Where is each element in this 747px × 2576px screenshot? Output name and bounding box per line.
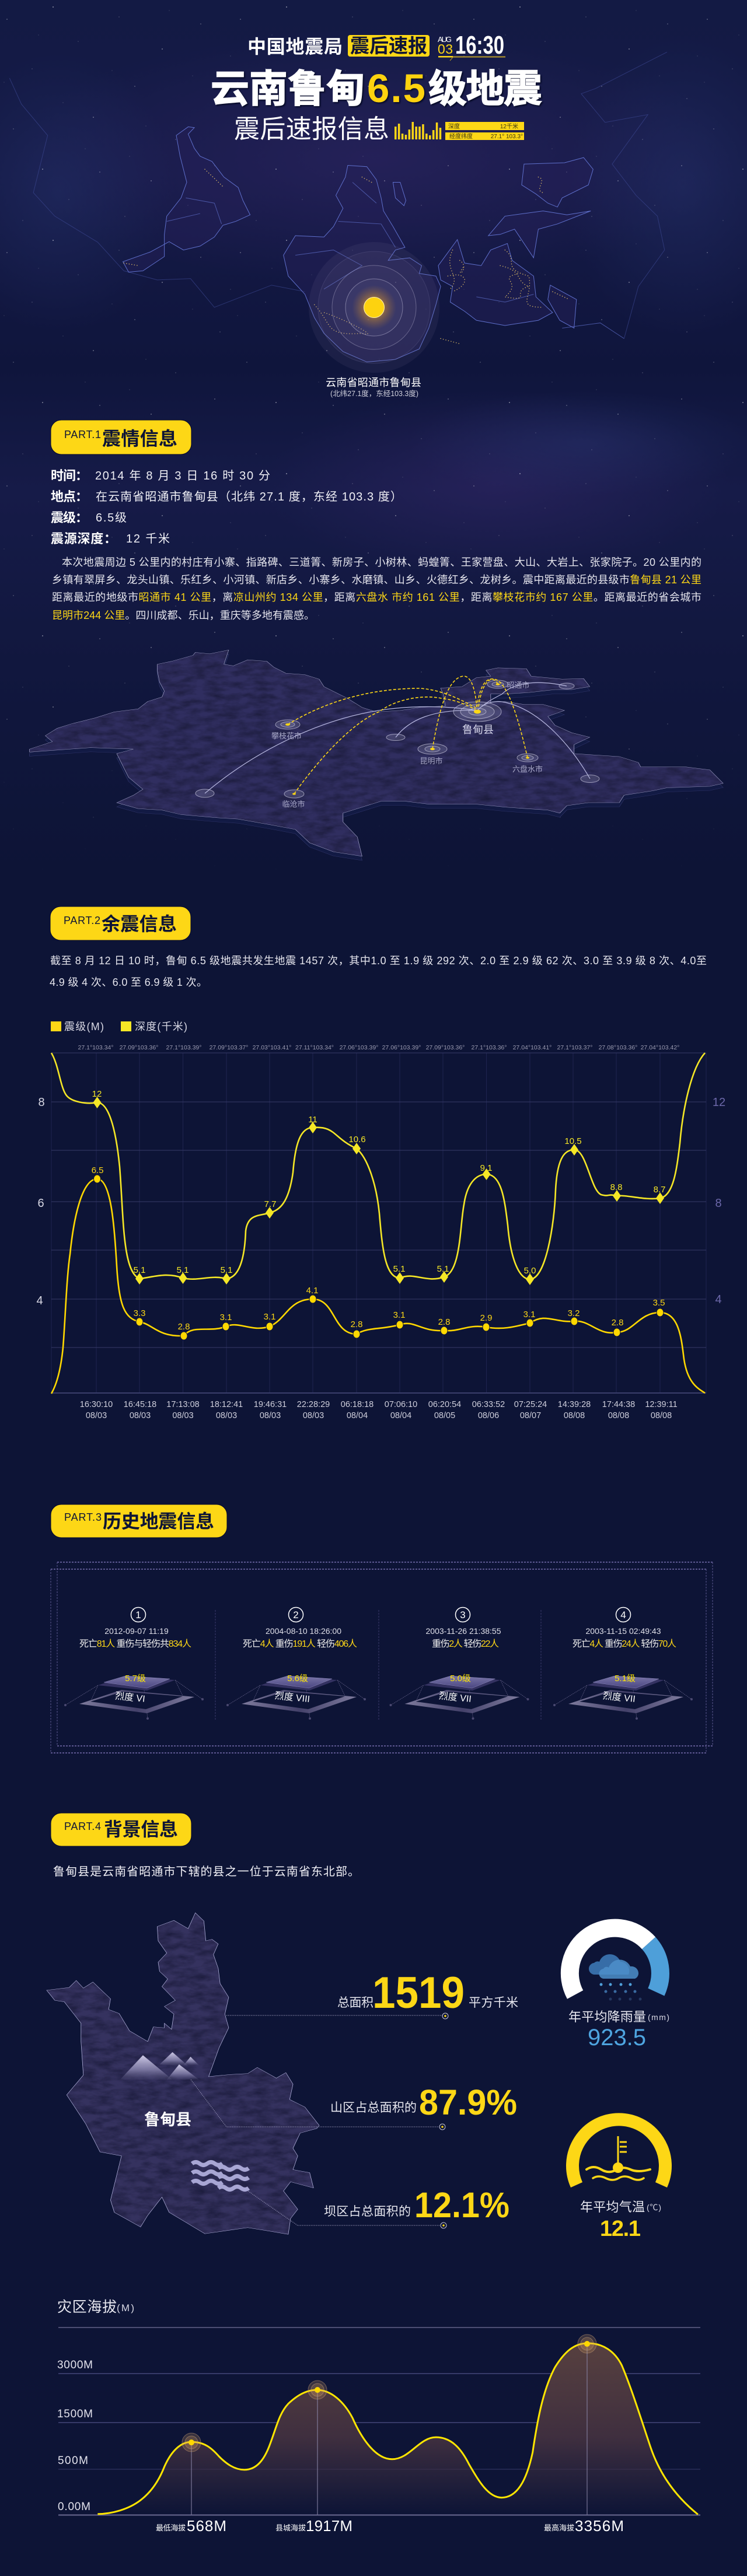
heading: part 1	[51, 420, 191, 454]
magnitude series: 2.8	[612, 1318, 623, 1328]
date and time: 03	[438, 41, 453, 57]
magnitude series: 3.3	[134, 1308, 145, 1318]
history card 3: 5.0级	[450, 1674, 471, 1684]
axis labels: 1500M	[57, 2408, 93, 2420]
epicentre marker	[309, 242, 439, 373]
history card 1: 1	[135, 1609, 141, 1620]
depth series: 5.1	[177, 1265, 189, 1275]
epicentre caption	[326, 377, 421, 398]
time labels: 08/03	[260, 1411, 281, 1420]
facts list: 2014 年 8 月 3 日 16 时 30 分	[95, 469, 270, 482]
stat: total area	[337, 1968, 518, 2018]
time labels	[80, 1400, 678, 1420]
time labels: 06:33:52	[472, 1400, 505, 1409]
decorative bars	[395, 122, 441, 139]
coordinates row: 27.09°103.36°	[120, 1044, 158, 1051]
elevation chart	[57, 2328, 700, 2535]
axis labels: 0.00M	[58, 2501, 90, 2513]
chart legend: 震级(M)	[64, 1021, 104, 1032]
depth series: 12	[92, 1089, 102, 1099]
facts list: 在云南省昭通市鲁甸县（北纬 27.1 度，东经 103.3 度）	[96, 490, 402, 503]
time labels: 16:45:18	[124, 1400, 156, 1409]
history card 2	[226, 1608, 366, 1720]
coordinates row: 27.06°103.39°	[382, 1044, 421, 1051]
city labels: 鲁甸县	[462, 724, 494, 736]
time labels: 06:18:18	[341, 1400, 374, 1409]
time labels: 17:44:38	[602, 1400, 635, 1409]
header strip	[247, 31, 505, 61]
time labels: 08/06	[478, 1411, 499, 1420]
coordinates row: 27.08°103.36°	[599, 1044, 637, 1051]
county map	[43, 1910, 324, 2236]
heading: part 4	[51, 1813, 191, 1846]
time labels: 08/03	[130, 1411, 151, 1420]
tag: quick report: 震后速报	[350, 35, 427, 57]
magnitude series: 2.8	[178, 1322, 190, 1332]
coordinates row: 27.06°103.39°	[340, 1044, 378, 1051]
history card 1: 烈度 VI	[114, 1690, 145, 1704]
stat: basin share: 坝区占总面积的	[324, 2205, 411, 2218]
coordinates row: 27.1°103.36°	[472, 1044, 507, 1051]
elevation chart title: 灾区海拔	[57, 2299, 117, 2315]
info chips	[445, 122, 524, 140]
heading: part 2: 余震信息	[102, 914, 177, 935]
time labels: 17:13:08	[166, 1400, 200, 1409]
elevation chart title: (M)	[117, 2302, 134, 2314]
stat: basin share	[324, 2185, 509, 2225]
time labels: 08/03	[86, 1411, 107, 1420]
aftershock line chart	[36, 1044, 725, 1420]
epicentre caption: (北纬27.1度，东经103.3度)	[330, 389, 418, 398]
main title: 6.5	[367, 66, 425, 111]
coordinates row: 27.03°103.41°	[253, 1044, 291, 1051]
aftershock paragraph: 截至 8 月 12 日 10 时，鲁甸 6.5 级地震共发生地震 1457 次，其中1.0 至 1.9 级 292 次、2.0 至 2.9 级 62 次、3.0 至 3.9 级 8 次、4.0至	[50, 955, 707, 967]
body paragraph: 昆明市244 公里。四川成都、乐山，重庆等多地有震感。	[52, 610, 315, 621]
right axis	[713, 1096, 725, 1306]
stat: total area: 总面积	[337, 1996, 374, 2010]
info chips: 经度纬度	[449, 132, 473, 140]
time labels: 08/08	[651, 1411, 672, 1420]
magnitude series: 2.8	[351, 1320, 362, 1329]
coordinates row: 27.04°103.41°	[513, 1044, 551, 1051]
history card 3: 2003-11-26 21:38:55	[426, 1626, 501, 1636]
history card 4: 烈度 VII	[602, 1690, 636, 1704]
history card 1: 2012-09-07 11:19	[104, 1626, 169, 1636]
body paragraph	[52, 556, 701, 621]
coordinates row: 27.1°103.39°	[166, 1044, 201, 1051]
coordinates row: 27.09°103.36°	[426, 1044, 465, 1051]
stat: mountain share: 山区占总面积的	[330, 2101, 417, 2115]
date and time: 16:30	[455, 31, 504, 60]
time labels: 08/05	[434, 1411, 455, 1420]
gauge: annual rainfall: (mm)	[648, 2013, 669, 2022]
depth series: 5.1	[437, 1264, 449, 1274]
peak labels: 3356M	[575, 2517, 624, 2535]
time labels: 19:46:31	[254, 1400, 287, 1409]
facts list: 震源深度：	[51, 531, 117, 546]
icon: mountains	[120, 2052, 199, 2080]
history card 3: 烈度 VII	[438, 1690, 472, 1704]
coordinates row: 27.11°103.34°	[295, 1044, 334, 1051]
stat: mountain share: 87.9%	[419, 2082, 517, 2122]
history card 4	[553, 1608, 693, 1720]
time labels: 08/03	[216, 1411, 237, 1420]
main title: 级地震	[428, 67, 542, 110]
history card 2: 烈度 VIII	[274, 1690, 310, 1704]
magnitude series: 3.1	[220, 1312, 232, 1322]
facts list: 地点：	[51, 489, 88, 504]
city labels: 昭通市	[507, 681, 530, 690]
magnitude series: 3.1	[393, 1310, 405, 1320]
history card 1	[64, 1608, 204, 1720]
gauge: annual temperature	[573, 2119, 665, 2241]
history card 4: 4	[620, 1609, 626, 1620]
city labels: 临沧市	[282, 800, 305, 808]
magnitude series: 3.1	[523, 1310, 535, 1320]
icon: thermometer over water	[587, 2136, 650, 2180]
gauge: annual rainfall: 年平均降雨量	[568, 2010, 646, 2024]
date and time	[438, 31, 505, 61]
city dots	[285, 683, 529, 795]
body paragraph: 乡镇有翠屏乡、龙头山镇、乐红乡、小河镇、新店乡、小寨乡、水磨镇、山乡、火德红乡、龙树乡。震中距离最近的县级市鲁甸县 21 公里	[52, 574, 701, 586]
history card 2: 死亡4人 重伤191人 轻伤406人	[243, 1639, 357, 1649]
magnitude series: 3.1	[264, 1312, 275, 1322]
time labels: 22:28:29	[297, 1400, 330, 1409]
leader lines	[191, 2015, 442, 2225]
city labels	[271, 681, 543, 808]
peak labels: 568M	[187, 2517, 226, 2535]
time labels: 08/03	[303, 1411, 324, 1420]
gauge: annual temperature: 12.1	[600, 2217, 641, 2241]
right axis: 12	[713, 1096, 725, 1109]
peak labels: 最高海拔	[544, 2524, 574, 2532]
axis labels: 500M	[58, 2455, 88, 2467]
chart legend: 深度(千米)	[135, 1021, 187, 1032]
info chips: 深度	[448, 123, 460, 130]
white route lines	[205, 682, 590, 793]
starry header backdrop	[0, 0, 747, 875]
facts list: 时间：	[51, 468, 88, 483]
axis labels	[57, 2359, 93, 2513]
coordinates row: 27.04°103.42°	[641, 1044, 679, 1051]
time labels: 08/04	[390, 1411, 411, 1420]
magnitude series: 2.9	[480, 1313, 492, 1323]
icon: rain cloud	[589, 1954, 642, 2001]
coordinates row: 27.1°103.34°	[78, 1044, 113, 1051]
aftershock paragraph	[50, 955, 707, 988]
history card 3: 重伤2人 轻伤22人	[432, 1639, 499, 1649]
heading: part 1: PART.1	[64, 429, 101, 440]
time labels: 07:06:10	[385, 1400, 417, 1409]
time labels: 08/08	[564, 1411, 585, 1420]
chart legend	[51, 1021, 187, 1032]
left axis: 8	[38, 1096, 45, 1109]
depth series: 8.7	[654, 1185, 665, 1195]
icon: water waves	[192, 2162, 249, 2190]
heading: part 4: PART.4	[64, 1821, 101, 1832]
depth series: 7.7	[264, 1199, 276, 1209]
magnitude series: 6.5	[92, 1166, 103, 1175]
depth series: 5.0	[524, 1266, 536, 1276]
city labels: 六盘水市	[512, 765, 543, 774]
peak labels: 1917M	[306, 2517, 352, 2535]
info chips: 27.1° 103.3°	[491, 134, 523, 140]
heading: part 3	[51, 1504, 227, 1538]
time labels: 07:25:24	[514, 1400, 547, 1409]
gauge: annual rainfall	[568, 1928, 669, 2050]
depth series: 8.8	[610, 1182, 622, 1192]
magnitude series: 3.2	[568, 1308, 580, 1318]
depth series	[51, 1053, 705, 1285]
peak labels	[156, 2517, 624, 2535]
left axis	[36, 1096, 45, 1307]
depth series: 5.1	[221, 1265, 232, 1275]
history card 3: 3	[460, 1609, 466, 1620]
gauge: annual rainfall: 923.5	[588, 2025, 646, 2050]
time labels: 08/07	[520, 1411, 541, 1420]
depth series: 5.1	[134, 1265, 145, 1275]
left axis: 6	[37, 1197, 44, 1210]
stat: total area: 1519	[372, 1968, 465, 2018]
magnitude series: 2.8	[438, 1317, 450, 1327]
right axis: 4	[715, 1293, 722, 1306]
county label: 鲁甸县	[144, 2111, 191, 2129]
time labels: 12:39:11	[645, 1400, 678, 1409]
time labels: 08/08	[608, 1411, 629, 1420]
history card 3	[390, 1608, 529, 1720]
body paragraph: 距离最近的地级市昭通市 41 公里，离凉山州约 134 公里，距离六盘水 市约 161 公里，距离攀枝花市约 167 公里。距离最近的省会城市	[52, 592, 701, 603]
coordinates row: 27.1°103.37°	[557, 1044, 592, 1051]
left axis: 4	[36, 1294, 43, 1307]
stat: mountain share	[330, 2082, 517, 2122]
history card 4: 2003-11-15 02:49:43	[586, 1626, 661, 1636]
subtitle: 震后速报信息	[234, 115, 389, 144]
world map	[9, 52, 667, 362]
depth series: 10.6	[348, 1135, 366, 1144]
date and time: AUG	[438, 35, 452, 44]
magnitude series	[51, 1166, 705, 1394]
history card 1: 5.7级	[125, 1674, 146, 1684]
depth series: 5.1	[393, 1264, 405, 1274]
city labels: 昆明市	[420, 757, 443, 765]
heading: part 2: PART.2	[64, 915, 100, 926]
heading: part 2	[50, 907, 191, 940]
time labels: 18:12:41	[210, 1400, 243, 1409]
facts list: 6.5级	[96, 511, 127, 524]
stat: basin share: 12.1%	[414, 2185, 509, 2225]
coordinates row: 27.09°103.37°	[210, 1044, 248, 1051]
time labels: 16:30:10	[80, 1400, 113, 1409]
time labels: 08/03	[172, 1411, 194, 1420]
facts list	[51, 468, 402, 546]
body paragraph: 本次地震周边 5 公里内的村庄有小寨、指路碑、三道箐、新房子、小树林、蚂蝗箐、王家营盘、大山、大岩上、张家院子。20 公里内的	[62, 556, 701, 568]
facts list: 震级：	[51, 510, 88, 525]
peak labels: 最低海拔	[156, 2524, 186, 2532]
history card 4: 死亡4人 重伤24人 轻伤70人	[573, 1639, 676, 1649]
history card 1: 死亡81人 重伤与轻伤共834人	[79, 1639, 191, 1649]
province map	[29, 650, 724, 861]
heading: part 1: 震情信息	[102, 428, 177, 449]
city rings	[196, 680, 599, 798]
stat: total area: 平方千米	[469, 1996, 518, 2010]
gauge: annual temperature: (℃)	[647, 2203, 661, 2212]
aftershock paragraph: 4.9 级 4 次、6.0 至 6.9 级 1 次。	[50, 977, 207, 988]
header strip: 中国地震局	[247, 36, 343, 57]
depth series: 9.1	[480, 1163, 492, 1173]
time labels: 14:39:28	[558, 1400, 591, 1409]
magnitude series: 3.5	[653, 1298, 665, 1308]
epicentre caption: 云南省昭通市鲁甸县	[326, 377, 421, 388]
main title: 云南鲁甸	[211, 67, 365, 110]
time labels: 08/04	[347, 1411, 368, 1420]
peak markers	[182, 2334, 596, 2515]
axis labels: 3000M	[57, 2359, 93, 2371]
depth series: 10.5	[564, 1136, 582, 1146]
city labels: 攀枝花市	[271, 732, 302, 740]
background sentence: 鲁甸县是云南省昭通市下辖的县之一位于云南省东北部。	[53, 1865, 359, 1878]
depth series: 11	[308, 1115, 317, 1125]
history card 2: 2004-08-10 18:26:00	[266, 1626, 341, 1636]
history panel frame	[51, 1562, 713, 1753]
time labels: 06:20:54	[428, 1400, 461, 1409]
main title	[211, 66, 542, 111]
facts list: 12 千米	[126, 532, 170, 545]
heading: part 3: PART.3	[64, 1511, 102, 1523]
history card 2: 2	[293, 1609, 299, 1620]
history card 4: 5.1级	[615, 1674, 636, 1684]
peak labels: 县城海拔	[275, 2524, 306, 2532]
yellow dashed routes	[288, 676, 528, 794]
info chips: 12千米	[500, 123, 518, 130]
coordinates row	[78, 1044, 679, 1051]
right axis: 8	[715, 1197, 722, 1210]
history card 2: 5.6级	[287, 1674, 308, 1684]
heading: part 4: 背景信息	[104, 1819, 178, 1840]
magnitude series: 4.1	[306, 1286, 318, 1296]
heading: part 3: 历史地震信息	[103, 1511, 214, 1532]
gauge: annual temperature: 年平均气温	[580, 2200, 645, 2214]
